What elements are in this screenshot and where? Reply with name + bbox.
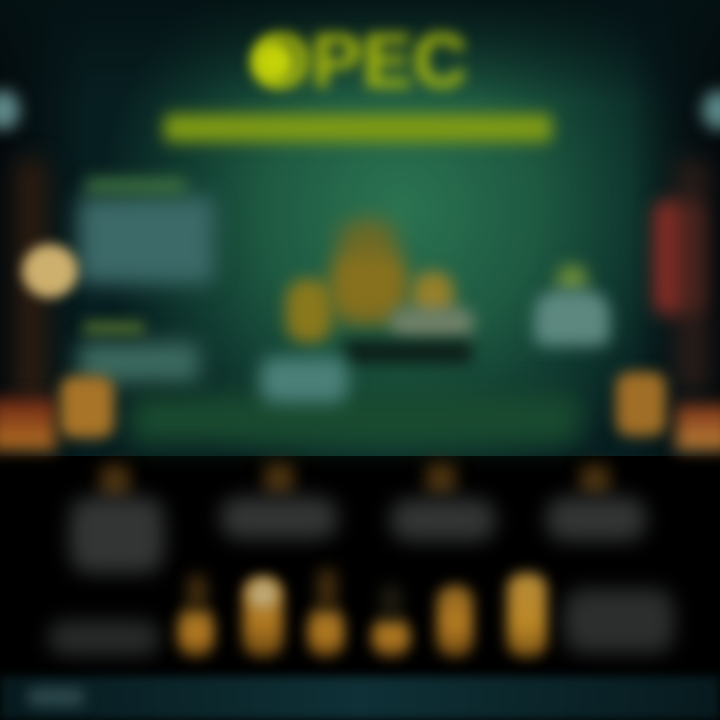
floor band [130,395,580,443]
bottom left red glow [0,398,56,450]
text card upper left [78,196,214,284]
card 1 [70,497,164,573]
pale pedestal [260,357,348,403]
left bottom text [48,621,160,655]
figure left [286,279,332,343]
bottle 2 cap [248,579,278,609]
left flagpole [16,160,46,400]
figure centre torso [332,255,406,315]
gold medallion [22,244,78,298]
lower section: icons and cards [42,455,683,666]
card 4 [546,497,646,541]
right lamp [702,90,720,130]
bottle 4 [372,617,410,657]
card heading lower left [84,322,144,334]
left lamp [0,90,20,130]
bottle 2 [243,577,283,657]
bottom right red glow [676,404,720,450]
bottle 4 neck [382,585,400,619]
figure right [412,271,454,321]
text card lower left [78,342,200,384]
barrel right [616,372,666,436]
icon 4 [580,465,610,495]
bottle 1 neck [188,575,206,609]
bottle 3 neck [318,569,336,609]
background: green stage panel [0,0,720,456]
dark base [344,340,472,364]
central group of figures [250,208,482,414]
title dot [252,40,296,84]
right panel: dark edge [630,0,720,456]
right side figure [525,256,620,356]
card 2 [220,497,338,539]
card 3 [390,499,496,541]
icon 3 [426,463,456,495]
bottle 1 [178,607,214,657]
top shade [0,0,720,100]
footer logo [28,688,84,706]
bottle 5 [437,585,473,657]
figure centre [338,219,398,324]
right flagpole [676,160,708,390]
right flag [654,200,700,315]
footer band [0,676,720,720]
figure body [534,290,610,346]
bottle 6 [507,573,547,657]
subtitle [164,114,552,142]
icon 1 [100,465,130,499]
title: OPEC [252,19,468,104]
card heading upper left [86,178,186,194]
icon 2 [264,463,294,495]
figure head [556,264,588,294]
right bottom card [564,589,674,653]
barrel left [60,376,114,438]
bottle 3 [308,607,344,657]
left panel: dark edge [0,0,90,456]
figure right body [390,307,474,339]
